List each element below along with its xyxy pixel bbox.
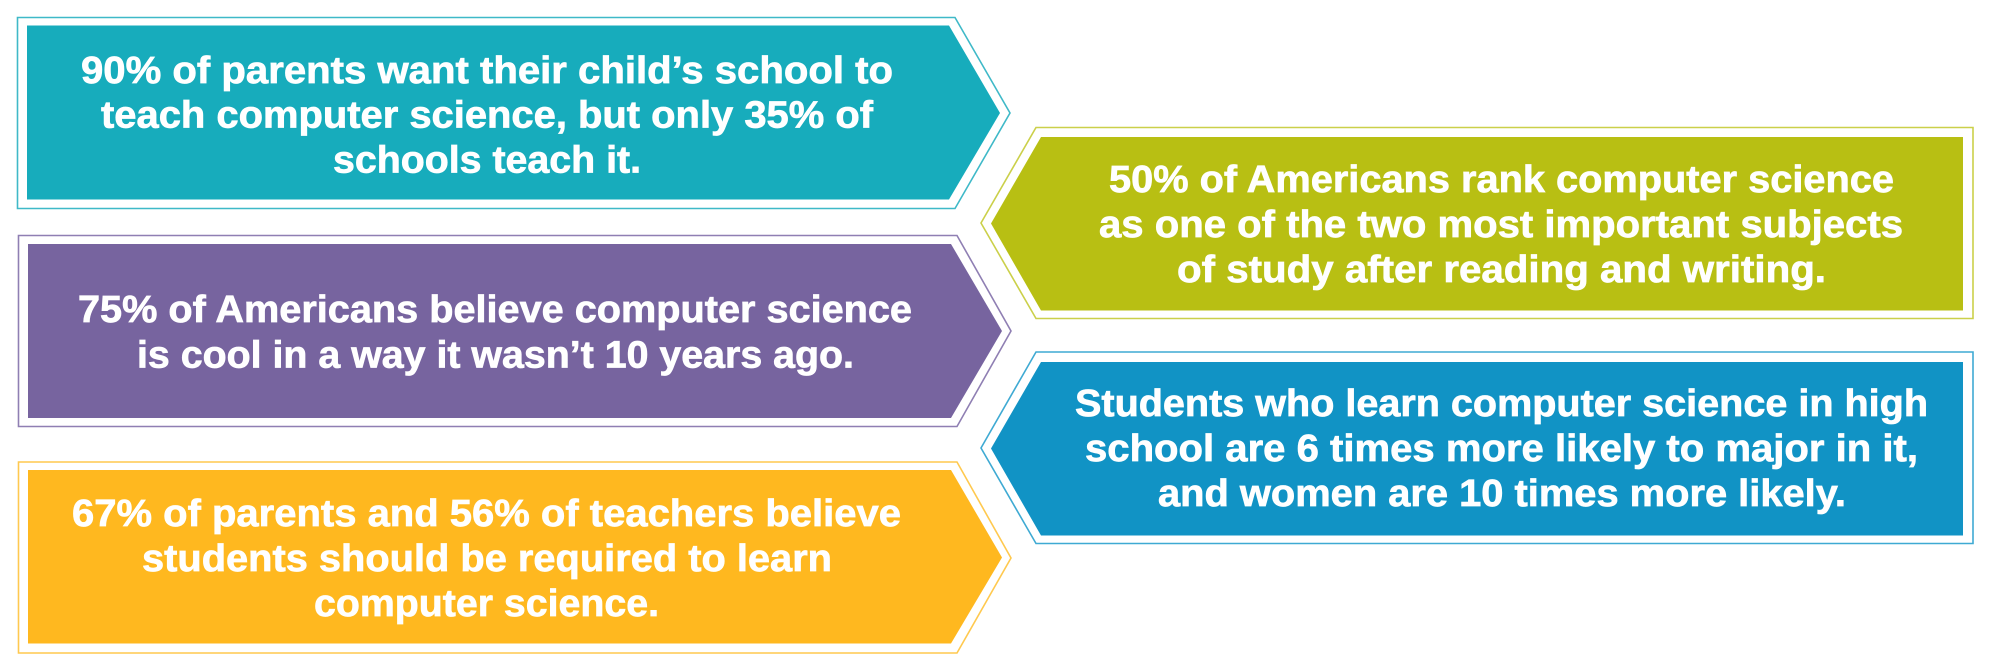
yellow arrow outline xyxy=(18,462,1011,653)
teal arrow text: 90% of parents want their child’s school to xyxy=(81,50,893,92)
blue arrow text: Students who learn computer science in high xyxy=(1075,383,1928,425)
teal arrow fill xyxy=(27,26,1000,200)
green arrow text: of study after reading and writing. xyxy=(1177,249,1826,291)
purple arrow fill xyxy=(28,244,1002,418)
teal arrow text: schools teach it. xyxy=(333,140,641,182)
blue arrow text: and women are 10 times more likely. xyxy=(1158,473,1846,515)
green arrow text xyxy=(1099,159,1903,291)
blue arrow text: school are 6 times more likely to major in it, xyxy=(1085,428,1918,470)
panel: teal arrow, parents want CS xyxy=(18,18,1010,208)
blue arrow fill xyxy=(991,362,1963,536)
yellow arrow text: students should be required to learn xyxy=(142,538,832,580)
purple arrow outline xyxy=(18,236,1011,426)
green arrow text: as one of the two most important subjects xyxy=(1099,204,1903,246)
panel: yellow arrow, required learning xyxy=(18,462,1011,653)
yellow arrow text: 67% of parents and 56% of teachers believe xyxy=(72,493,901,535)
yellow arrow text: computer science. xyxy=(314,583,659,625)
green arrow fill xyxy=(991,137,1963,310)
panel: green arrow, important subjects xyxy=(981,128,1973,318)
teal arrow outline xyxy=(18,18,1010,208)
purple arrow text: is cool in a way it wasn’t 10 years ago. xyxy=(137,334,854,376)
teal arrow text: teach computer science, but only 35% of xyxy=(101,94,873,136)
yellow arrow fill xyxy=(28,470,1002,644)
teal arrow text xyxy=(81,50,893,182)
green arrow text: 50% of Americans rank computer science xyxy=(1109,159,1894,201)
panel: blue arrow, students major in CS xyxy=(981,352,1973,544)
yellow arrow text xyxy=(72,493,901,625)
purple arrow text: 75% of Americans believe computer science xyxy=(78,289,912,331)
green arrow outline xyxy=(981,128,1973,318)
blue arrow text xyxy=(1075,383,1928,515)
purple arrow text xyxy=(78,289,912,376)
panel: purple arrow, CS is cool xyxy=(18,236,1011,426)
blue arrow outline xyxy=(981,352,1973,544)
